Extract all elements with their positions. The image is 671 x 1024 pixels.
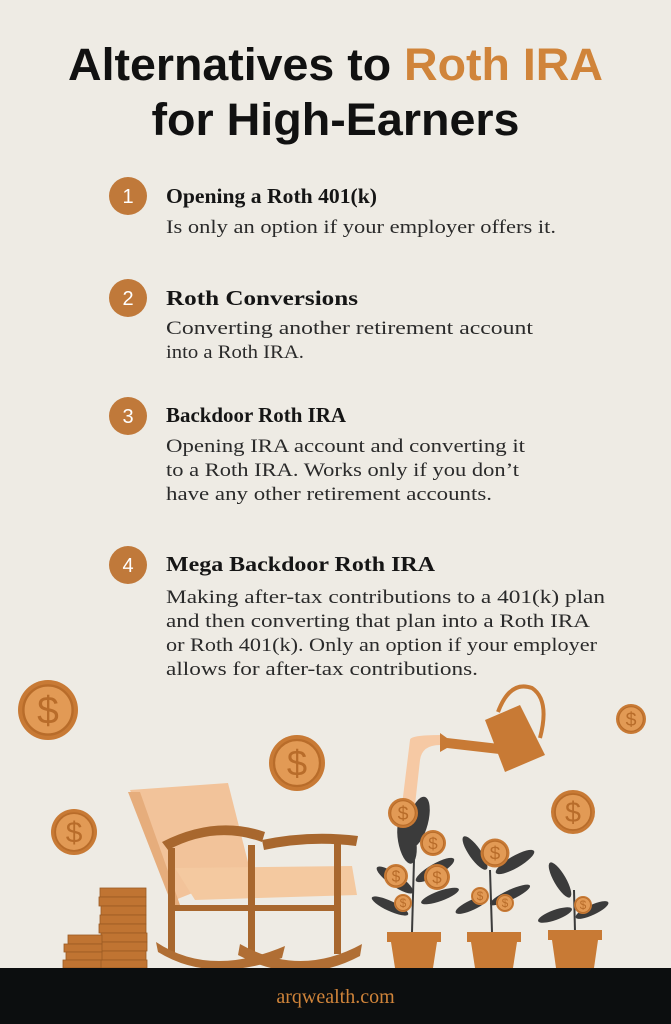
item 1: Opening a Roth 401(k) (166, 184, 377, 208)
number badge 1: 1 (122, 186, 134, 208)
item 1: Is only an option if your employer offers it. (166, 218, 556, 238)
item 2: Roth Conversions (166, 286, 358, 310)
illustration: flower pots (387, 930, 602, 968)
illustration: coin stacks (63, 888, 147, 968)
illustration: watering can and arm (402, 686, 545, 805)
title (68, 39, 603, 145)
number badge 4: 4 (122, 555, 134, 577)
item 2 (109, 279, 534, 363)
number badge 3: 3 (122, 406, 134, 428)
item 4 (109, 546, 605, 680)
title: for High-Earners (152, 94, 520, 145)
illustration: plants with coin leaves (370, 794, 610, 932)
item 3: Backdoor Roth IRA (166, 403, 347, 427)
number badge 1 (109, 177, 147, 215)
number badge 3 (109, 397, 147, 435)
item 3: have any other retirement accounts. (166, 485, 492, 505)
number badge 2 (109, 279, 147, 317)
footer: arqwealth.com (276, 986, 395, 1008)
item 3: Opening IRA account and converting it (166, 437, 526, 457)
item 3 (109, 397, 526, 505)
illustration: rocking chair (128, 783, 362, 972)
illustration: floating coins (18, 680, 646, 855)
item 4: Mega Backdoor Roth IRA (166, 552, 436, 576)
item 4: allows for after-tax contributions. (166, 660, 478, 680)
item 3: to a Roth IRA. Works only if you don’t (166, 461, 520, 481)
item 4: and then converting that plan into a Roth IRA (166, 612, 591, 632)
title: Alternatives to Roth IRA (68, 39, 603, 90)
item 2: into a Roth IRA. (166, 343, 304, 363)
number badge 2: 2 (122, 288, 134, 310)
item 1 (109, 177, 556, 238)
item 4: or Roth 401(k). Only an option if your employer (166, 636, 597, 656)
footer (0, 968, 671, 1024)
item 2: Converting another retirement account (166, 319, 534, 339)
item 4: Making after-tax contributions to a 401(k) plan (166, 588, 605, 608)
number badge 4 (109, 546, 147, 584)
